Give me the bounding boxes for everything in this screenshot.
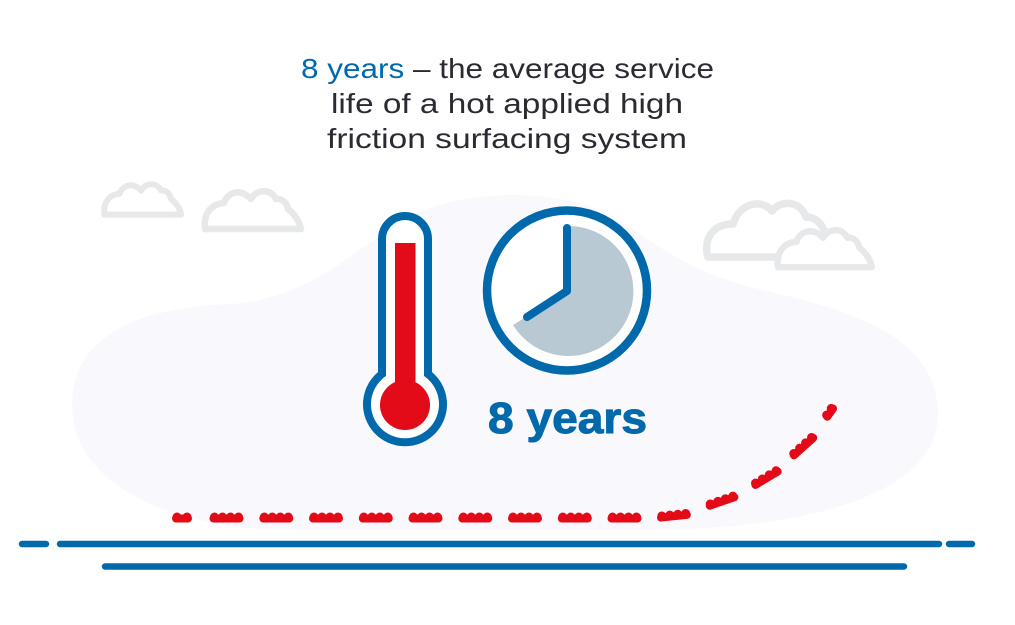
background blob [72, 195, 938, 530]
cloud: left [205, 191, 301, 229]
title: friction surfacing system [327, 123, 687, 154]
cloud: far left [104, 184, 181, 215]
dashed red line [172, 402, 837, 522]
label: 8 years: 8 years [488, 394, 647, 443]
icon: clock [487, 210, 647, 370]
cloud: right large [707, 203, 824, 257]
icon: thermometer [367, 216, 443, 442]
title: life of a hot applied high [331, 88, 683, 119]
cloud: right small [778, 230, 872, 267]
title [301, 53, 714, 154]
title: 8 years – the average service [301, 53, 714, 84]
road lines [22, 544, 972, 566]
